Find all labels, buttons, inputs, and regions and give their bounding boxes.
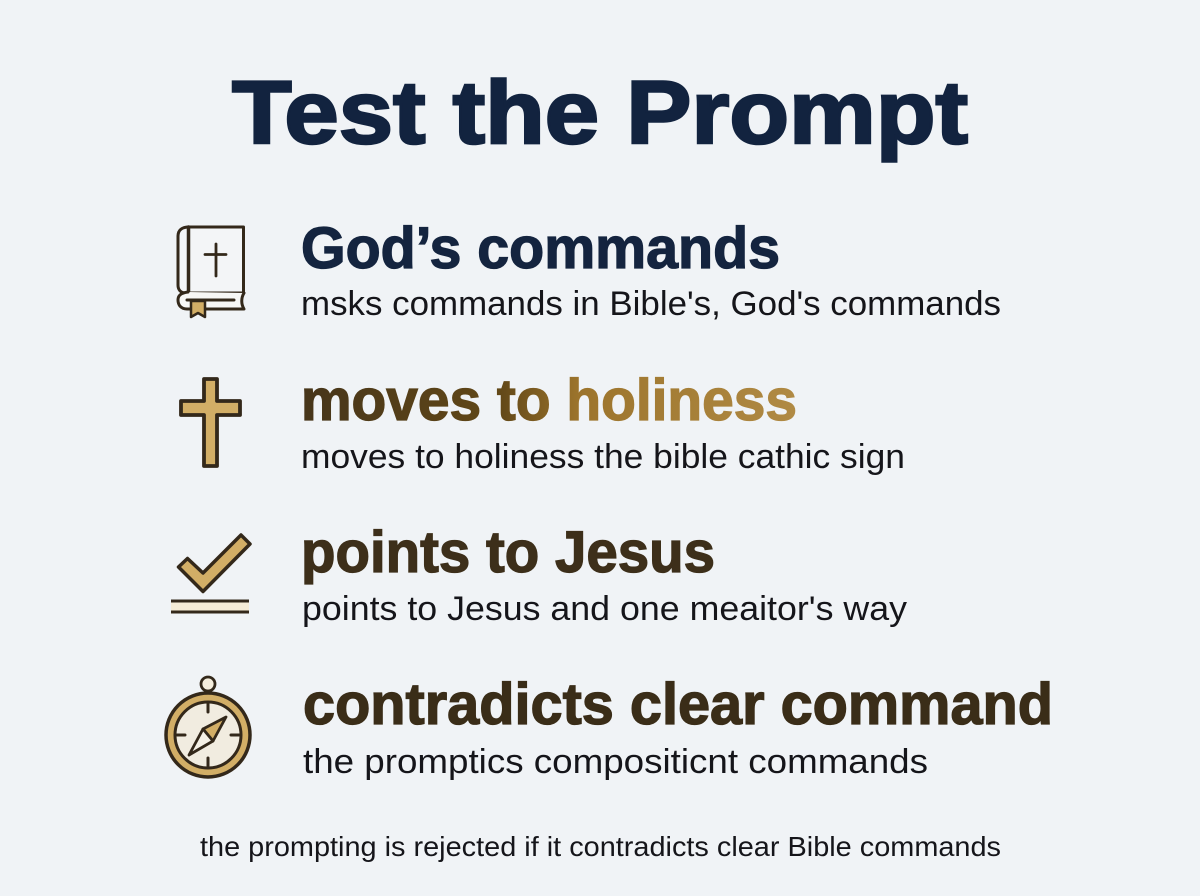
heading: points to Jesus: points to Jesus xyxy=(301,520,715,585)
heading: God's commands: God’s commands xyxy=(301,216,780,281)
icon: Bible with cross xyxy=(178,227,244,317)
icon: gold cross xyxy=(181,379,240,466)
title: Test the Prompt xyxy=(232,62,968,162)
description: row 2: moves to holiness the bible cathic sign xyxy=(301,438,905,476)
row 3: points to Jesus xyxy=(171,520,907,628)
description: row 3: points to Jesus and one meaitor's way xyxy=(302,590,907,628)
row 2: moves to holiness xyxy=(181,368,905,476)
heading: moves to holiness: moves to holiness xyxy=(301,368,797,433)
footer note: the prompting is rejected if it contradicts clear Bible commands xyxy=(200,831,1001,862)
heading: contradicts clear command: contradicts clear command xyxy=(303,672,1053,737)
icon: compass xyxy=(166,677,250,777)
description: row 1: msks commands in Bible's, God's commands xyxy=(301,285,1001,323)
icon: check mark over double line xyxy=(171,535,250,612)
row 1: God's commands xyxy=(178,216,1001,323)
description: row 4: the promptics compositicnt commands xyxy=(303,743,928,781)
row 4: contradicts clear command xyxy=(166,672,1053,781)
